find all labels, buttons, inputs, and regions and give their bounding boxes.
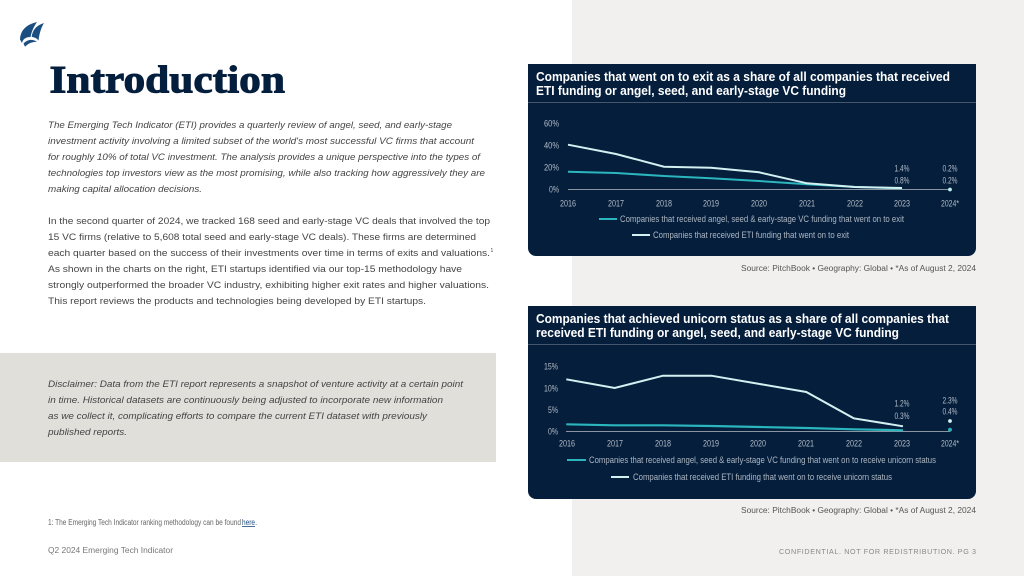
x axis labels: 2017 xyxy=(607,438,623,450)
source note: exit chart: Source: PitchBook • Geography: Global • *As of August 2, 2024 xyxy=(741,264,977,273)
footer: confidentiality and page number: CONFIDENTIAL. NOT FOR REDISTRIBUTION. PG 3 xyxy=(779,547,976,556)
line: ETI exits xyxy=(568,145,902,188)
y axis labels: 60% xyxy=(544,118,559,130)
heading: exit chart title xyxy=(536,70,950,98)
title: Introduction xyxy=(50,58,285,102)
y axis labels: 10% xyxy=(544,384,558,394)
panel: unicorn share chart xyxy=(528,306,976,499)
x axis labels: 2020 xyxy=(750,438,766,450)
marker: 2024 point xyxy=(948,188,952,191)
data labels: 2.3% xyxy=(942,396,958,406)
y axis labels: 0% xyxy=(548,426,558,438)
x axis labels xyxy=(560,198,959,210)
data labels: 1.4% xyxy=(894,164,910,174)
x axis labels: 2019 xyxy=(703,438,719,450)
text block: second quarter summary: each quarter based on the success of their investments over time in terms of exits and valuations. xyxy=(48,247,490,258)
text block: second quarter summary xyxy=(48,215,494,306)
y axis labels xyxy=(544,118,559,196)
x axis labels: 2019 xyxy=(703,198,719,210)
text block: second quarter summary: 1 xyxy=(490,248,494,254)
text block: second quarter summary: This report reviews the products and technologies being developed by ETI startups. xyxy=(48,295,426,306)
data labels: 0.3% xyxy=(894,411,910,422)
x axis labels: 2024* xyxy=(941,198,959,210)
x axis labels xyxy=(559,438,959,450)
data labels: 0.8% xyxy=(894,176,910,186)
legend: Companies that received angel, seed & early-stage VC funding that went on to exit xyxy=(620,214,904,224)
text block: second quarter summary: 15 VC firms (relative to 5,608 total seed and early-stage VC deals). These firms are determined xyxy=(48,231,476,242)
heading: unicorn chart title: Companies that achieved unicorn status as a share of all companies that xyxy=(536,312,950,326)
text block: second quarter summary: In the second quarter of 2024, we tracked 168 seed and early-stage VC deals that involved the top xyxy=(48,215,490,226)
text block: ETI description: making capital allocation decisions. xyxy=(48,183,202,194)
x axis labels: 2018 xyxy=(655,438,671,450)
data labels xyxy=(894,164,958,186)
x axis labels: 2023 xyxy=(894,438,910,450)
footnote: . xyxy=(255,518,257,527)
legend xyxy=(567,455,936,482)
footnote: here xyxy=(242,518,255,527)
y axis labels: 20% xyxy=(544,162,559,174)
heading: exit chart title: ETI funding or angel, seed, and early-stage VC funding xyxy=(536,84,846,98)
heading: unicorn chart title: received ETI funding or angel, seed, and early-stage VC funding xyxy=(536,326,899,340)
text block: ETI description: for roughly 10% of total VC investment. The analysis provides a unique perspective into the types of xyxy=(48,151,481,162)
source note: unicorn chart: Source: PitchBook • Geography: Global • *As of August 2, 2024 xyxy=(741,506,977,515)
legend: Companies that received ETI funding that went on to receive unicorn status xyxy=(633,472,892,482)
panel: exit share chart xyxy=(528,64,976,256)
legend: Companies that received angel, seed & early-stage VC funding that went on to receive unicorn status xyxy=(589,455,936,465)
y axis labels: 0% xyxy=(549,184,559,196)
y axis labels: 5% xyxy=(548,405,558,416)
footnote: 1: The Emerging Tech Indicator ranking methodology can be found xyxy=(48,518,241,527)
data labels: 0.2% xyxy=(942,176,958,186)
text block: second quarter summary: As shown in the charts on the right, ETI startups identified via our top-15 methodology have xyxy=(48,263,462,274)
text block: second quarter summary: strongly outperformed the broader VC industry, exhibiting higher exit rates and higher valuations. xyxy=(48,279,489,290)
x axis labels: 2021 xyxy=(798,438,814,450)
line: angel, seed and early-stage exits xyxy=(568,172,902,188)
panel: disclaimer: published reports. xyxy=(47,426,127,437)
marker: 2024 ETI point xyxy=(948,419,952,423)
x axis labels: 2016 xyxy=(560,198,576,210)
x axis labels: 2021 xyxy=(799,198,815,210)
legend xyxy=(599,214,904,240)
data labels: 1.2% xyxy=(894,398,910,410)
marker: 2024 industry point xyxy=(948,428,952,432)
heading: exit chart title: Companies that went on to exit as a share of all companies that received xyxy=(536,70,950,84)
x axis labels: 2016 xyxy=(559,438,575,450)
text block: ETI description xyxy=(48,119,485,194)
panel: disclaimer: as we collect it, complicating efforts to compare the current ETI dataset with previously xyxy=(48,410,428,421)
panel: disclaimer: Disclaimer: Data from the ETI report represents a snapshot of venture activity at a certain point xyxy=(48,378,463,389)
heading: unicorn chart title xyxy=(536,312,950,340)
panel: disclaimer xyxy=(0,353,496,462)
x axis labels: 2020 xyxy=(751,198,767,210)
y axis labels: 15% xyxy=(544,362,558,372)
y axis labels: 40% xyxy=(544,140,559,152)
x axis labels: 2022 xyxy=(846,438,862,450)
x axis labels: 2024* xyxy=(941,438,959,450)
text block: ETI description: The Emerging Tech Indicator (ETI) provides a quarterly review of angel, seed, and early-stage xyxy=(48,119,452,130)
y axis labels xyxy=(544,362,558,438)
legend: Companies that received ETI funding that went on to exit xyxy=(653,230,849,240)
data labels xyxy=(894,396,958,422)
data labels: 0.4% xyxy=(942,406,958,418)
text block: ETI description: investment activity involving a limited subset of the world's most successful VC firms that account xyxy=(48,135,474,146)
x axis labels: 2022 xyxy=(847,198,863,210)
panel: disclaimer: in time. Historical datasets are continuously being adjusted to incorporate new information xyxy=(48,394,443,405)
line: ETI unicorns xyxy=(566,376,903,426)
x axis labels: 2018 xyxy=(656,198,672,210)
footer: report name: Q2 2024 Emerging Tech Indicator xyxy=(48,546,173,555)
x axis labels: 2023 xyxy=(894,198,910,210)
x axis labels: 2017 xyxy=(608,198,624,210)
icon: company logo xyxy=(20,22,44,47)
line: angel, seed and early-stage unicorns xyxy=(566,424,903,430)
data labels: 0.2% xyxy=(942,164,958,174)
text block: ETI description: technologies top investors view as the most promising, while also tracking how aggressively they are xyxy=(48,167,485,178)
